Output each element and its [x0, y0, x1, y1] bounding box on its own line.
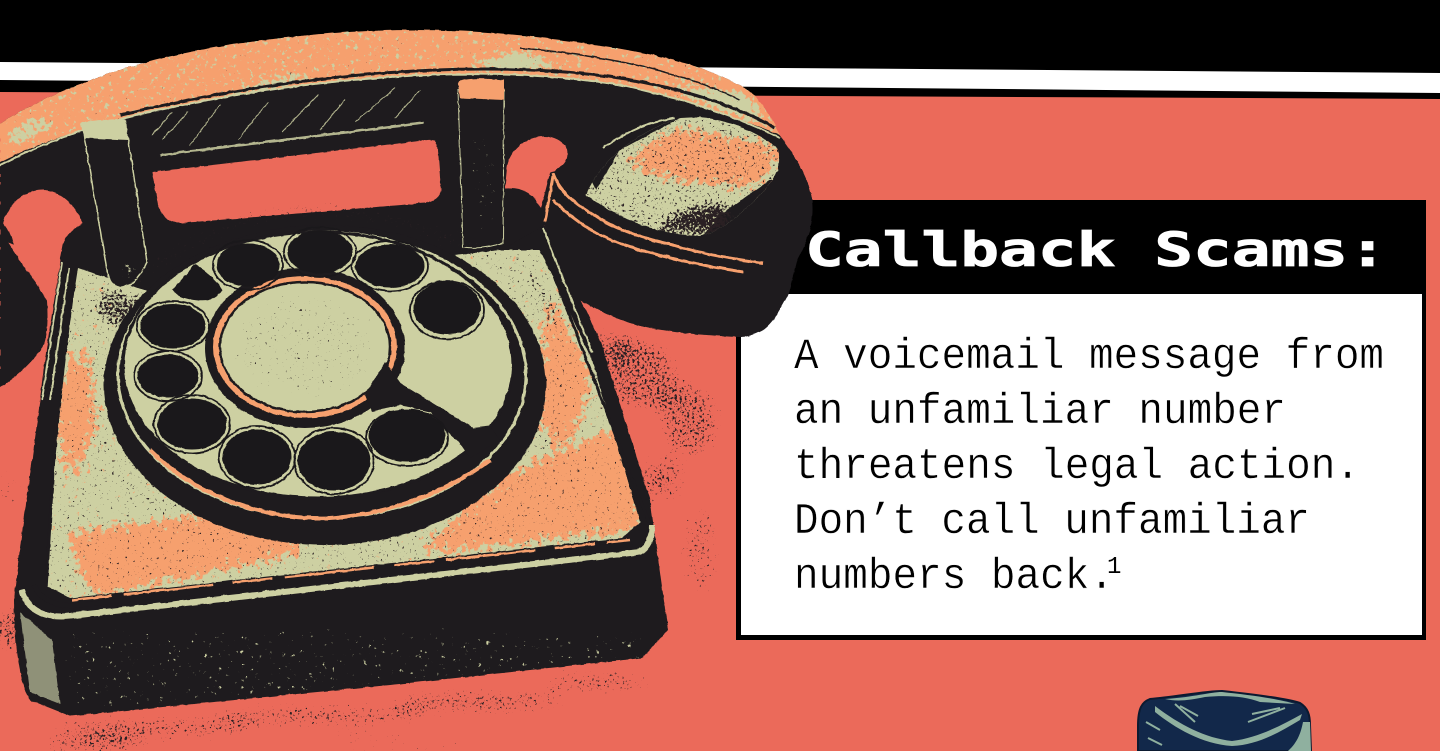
right cradle post	[458, 90, 504, 248]
panel body	[741, 294, 1422, 635]
body text: Don’t call unfamiliar	[794, 497, 1310, 547]
left earpiece	[0, 230, 48, 387]
body text: 1	[1107, 554, 1121, 581]
panel outline and header bar	[736, 200, 1426, 640]
cut-out: left	[3, 190, 83, 313]
body text: A voicemail message from	[794, 332, 1384, 382]
base rim	[22, 525, 652, 616]
body text: an unfamiliar number	[794, 387, 1286, 437]
top band: black and white stripes	[0, 0, 1440, 99]
ground speckles	[0, 327, 990, 751]
handle bar	[0, 30, 780, 162]
lid streaks	[1146, 704, 1285, 745]
panel: callback scams	[736, 200, 1426, 640]
rotary dial	[87, 213, 563, 557]
telephone base	[14, 225, 670, 716]
body text	[794, 332, 1384, 602]
cut-out: cradle window	[152, 140, 441, 223]
center disc	[205, 268, 405, 428]
illustration: rotary telephone	[0, 20, 813, 716]
handset and cradle	[0, 20, 813, 387]
earpiece bands	[553, 173, 763, 263]
lid rim highlight	[1165, 692, 1295, 704]
left cradle post	[84, 136, 147, 287]
finger stop	[365, 362, 500, 458]
finger holes	[138, 231, 480, 490]
lid front ridge	[1155, 706, 1302, 746]
earpiece dome	[586, 117, 779, 236]
lid side highlight	[1288, 722, 1311, 751]
base wall specks	[66, 628, 641, 706]
body text: numbers back.	[794, 552, 1114, 602]
heading: Callback Scams:	[805, 223, 1387, 278]
body text: threatens legal action.	[794, 442, 1360, 492]
handset hatching	[152, 88, 424, 155]
illustration: navy jar lid	[1138, 691, 1311, 751]
cut-out: right	[505, 137, 567, 208]
